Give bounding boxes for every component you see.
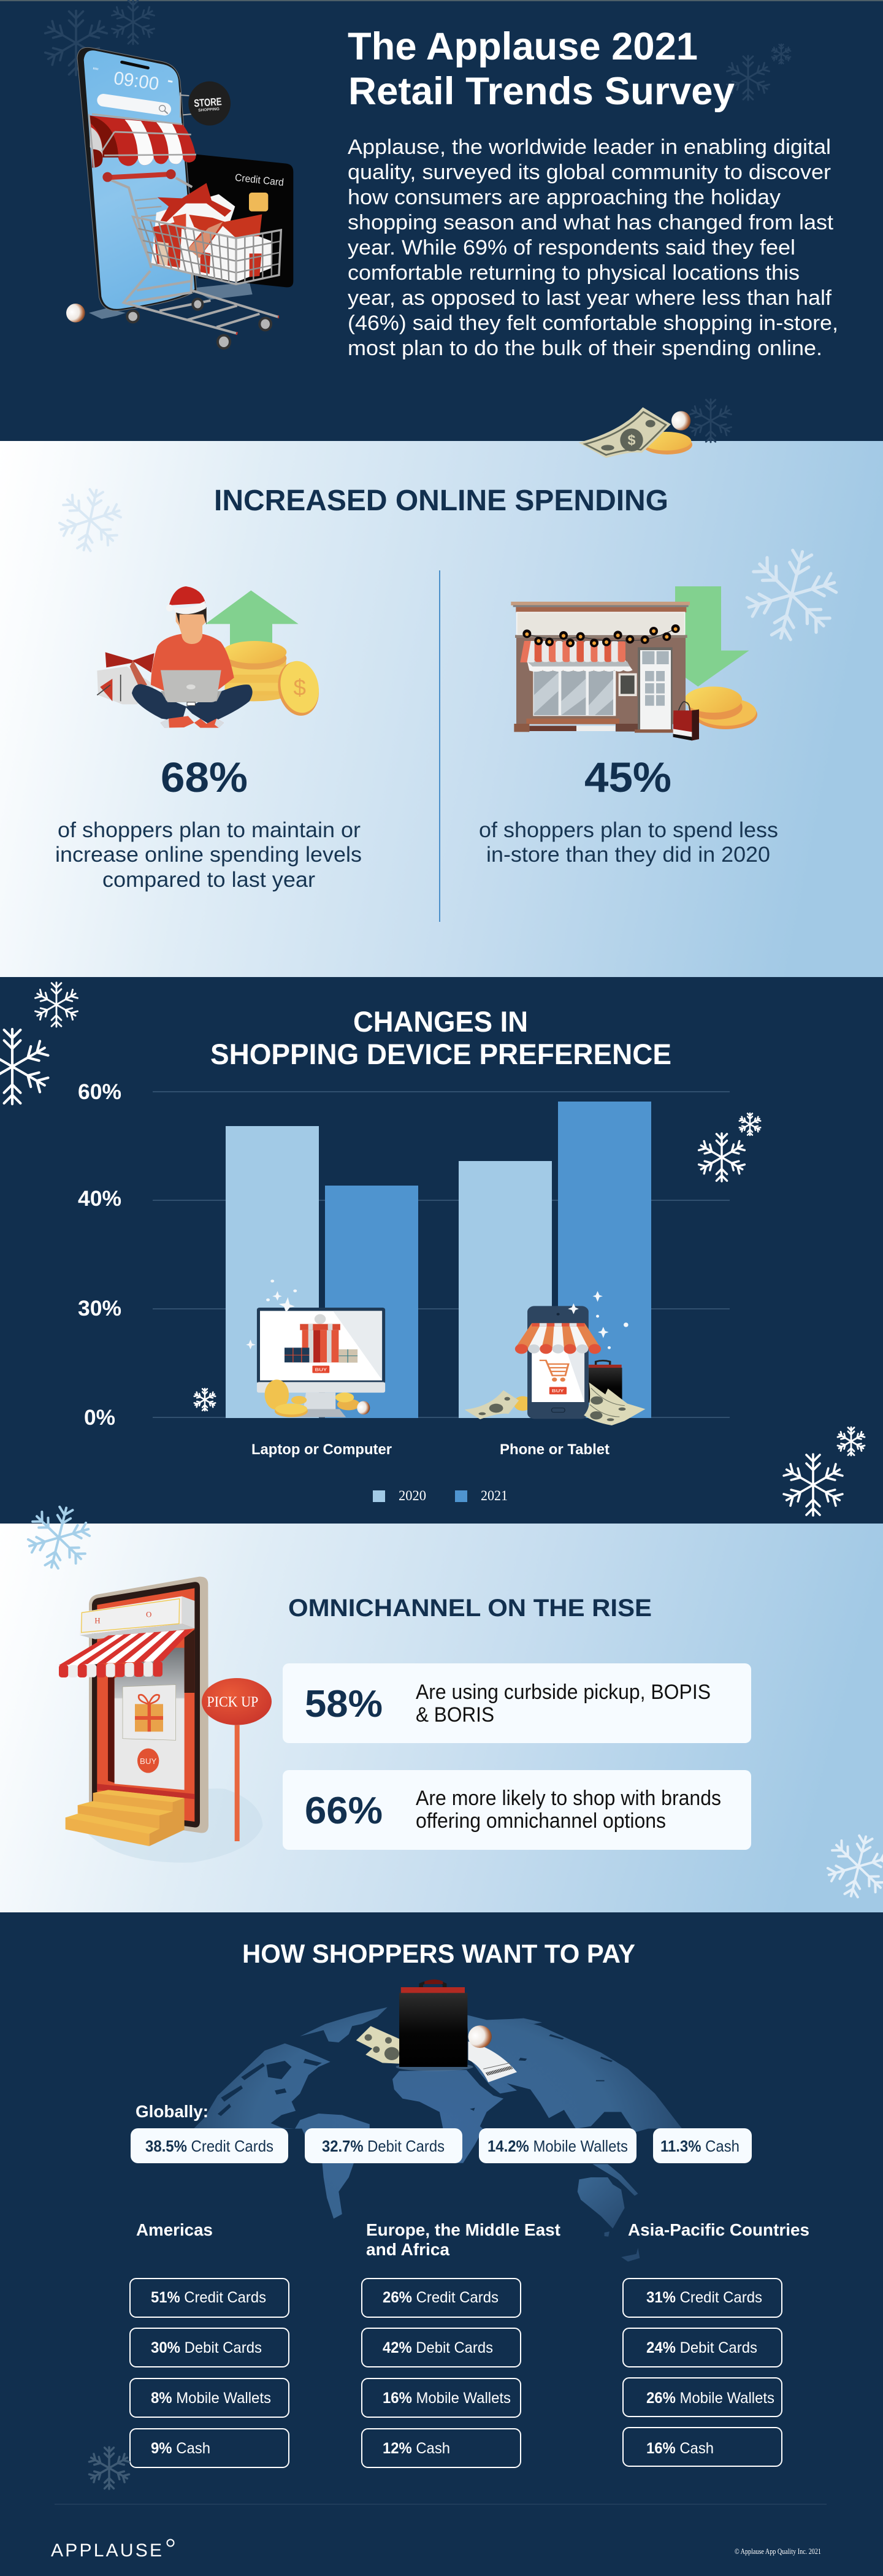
monitor	[257, 1308, 385, 1417]
shopping cart	[102, 169, 281, 348]
text: online spending description: compared to last year	[102, 867, 315, 892]
stat card: 66%	[283, 1770, 751, 1850]
intro text block	[348, 136, 838, 360]
text: online spending description	[55, 818, 362, 892]
pill: mobile wallets	[479, 2128, 636, 2163]
receipt	[468, 2041, 517, 2082]
intro text block: (46%) said they felt comfortable shopping in-store,	[348, 312, 838, 335]
awning	[515, 1323, 601, 1354]
category labels: Phone or Tablet	[500, 1441, 610, 1458]
stat: 68%: 68%	[161, 754, 248, 801]
credit card	[186, 153, 293, 287]
pill: debit cards: 32.7% Debit Cards	[322, 2137, 445, 2155]
region column: Americas: 8% Mobile Wallets	[151, 2390, 271, 2407]
region column: Europe, the Middle East and Africa: 12% Cash	[383, 2440, 450, 2457]
text: online spending description: of shoppers plan to maintain or	[58, 818, 361, 842]
gifts on screen	[285, 1314, 357, 1373]
phone	[77, 47, 197, 311]
global stat pills	[131, 2128, 752, 2163]
awning	[89, 114, 196, 167]
bars: 2020	[226, 1126, 552, 1418]
copyright: © Applause App Quality Inc. 2021	[735, 2547, 821, 2556]
region column: Asia-Pacific Countries: 31% Credit Cards	[646, 2289, 762, 2306]
section snowflakes	[0, 983, 865, 1516]
store sign: STORE	[194, 95, 222, 109]
heading: SHOPPING DEVICE PREFERENCE	[210, 1038, 671, 1070]
pill: cash	[653, 2128, 752, 2163]
money stack	[356, 2026, 403, 2064]
region column: Europe, the Middle East and Africa: 16% Mobile Wallets	[383, 2390, 511, 2407]
string lights	[522, 624, 680, 647]
panel: header	[45, 0, 838, 442]
storefront awning	[520, 641, 633, 672]
section snowflakes	[55, 484, 844, 648]
phone store body	[89, 1577, 208, 1833]
store sign: SHOPPING	[198, 107, 220, 113]
steps	[66, 1790, 185, 1846]
region column: Europe, the Middle East and Africa: 26% Credit Cards	[383, 2289, 499, 2306]
gift card on screen: BUY	[140, 1757, 156, 1766]
sign box: O	[146, 1611, 151, 1619]
bag	[396, 1979, 473, 2071]
region column: Americas	[130, 2220, 289, 2467]
ground shadow	[88, 1788, 262, 1863]
panel: device preference	[0, 983, 865, 1516]
illustration: brick store with coins and down arrow	[511, 586, 757, 740]
phone: 09:00	[112, 68, 160, 94]
icon: shopping bag with money, receipt and ball	[356, 1979, 517, 2082]
heading: CHANGES IN	[353, 1005, 528, 1038]
gifts on screen: BUY	[315, 1367, 327, 1372]
heading: HOW SHOPPERS WANT TO PAY	[242, 1939, 635, 1969]
stat: 45%: 45%	[584, 754, 671, 801]
grid lines and axis labels: 60%	[78, 1080, 121, 1104]
legend	[373, 1488, 508, 1503]
bag	[589, 1360, 622, 1403]
footer	[51, 2504, 827, 2561]
world map globe	[194, 2007, 682, 2261]
illustration: smartphone shop with money and bag	[465, 1291, 645, 1425]
panel: omnichannel on the rise	[23, 1501, 883, 1903]
region column: Europe, the Middle East and Africa: and Africa	[366, 2240, 449, 2259]
snowflake	[89, 2447, 129, 2489]
pill: cash: 11.3% Cash	[660, 2137, 740, 2155]
sign box: H	[94, 1617, 101, 1625]
region column: Americas: 30% Debit Cards	[151, 2339, 262, 2356]
intro text block: Applause, the worldwide leader in enabling digital	[348, 136, 831, 159]
section snowflakes	[23, 1501, 883, 1903]
pill: debit cards	[305, 2128, 462, 2163]
intro text block: how consumers are approaching the holiday	[348, 186, 781, 209]
text: in-store spending description: of shoppers plan to spend less	[479, 818, 778, 842]
bars: 2021	[325, 1102, 651, 1418]
shopping bag	[673, 702, 699, 740]
title: The Applause 2021	[348, 25, 698, 68]
region column: Europe, the Middle East and Africa: Europe, the Middle East	[366, 2220, 560, 2239]
wheels	[127, 299, 271, 348]
pick up sign: PICK UP	[207, 1695, 258, 1711]
coin stack	[221, 641, 324, 719]
region column: Asia-Pacific Countries: 26% Mobile Wallets	[646, 2390, 774, 2407]
text: in-store spending description: in-store than they did in 2020	[486, 842, 770, 867]
text: in-store spending description	[479, 818, 778, 867]
region column: Asia-Pacific Countries: Asia-Pacific Countries	[628, 2220, 809, 2239]
stat card: 66%: Are more likely to shop with brands	[416, 1787, 721, 1810]
coins	[685, 686, 757, 729]
bar chart	[78, 1080, 730, 1503]
sparkles	[246, 1279, 297, 1349]
region column: Americas: Americas	[136, 2220, 213, 2239]
money right	[584, 1382, 645, 1425]
stat card: 58%	[283, 1663, 751, 1743]
category labels	[251, 1441, 610, 1458]
cart icon	[540, 1360, 568, 1376]
pick up sign	[202, 1678, 272, 1841]
title	[348, 25, 735, 113]
region column: Europe, the Middle East and Africa	[362, 2220, 560, 2467]
store building	[511, 602, 690, 733]
section background: device preference	[0, 977, 883, 1524]
intro text block: most plan to do the bulk of their spending online.	[348, 337, 822, 360]
region column: Asia-Pacific Countries	[623, 2220, 809, 2466]
money left	[465, 1390, 532, 1419]
panel: how shoppers want to pay	[89, 1939, 809, 2489]
illustration: desktop computer with gifts and coins	[246, 1279, 385, 1417]
intro text block: comfortable returning to physical locations this	[348, 261, 800, 285]
striped awning	[59, 1630, 192, 1677]
ball ornament	[66, 304, 85, 323]
region column: Americas: 51% Credit Cards	[151, 2289, 266, 2306]
logo: Applause: APPLAUSE	[51, 2540, 162, 2561]
stat card: 66%: offering omnichannel options	[416, 1809, 666, 1833]
grid lines and axis labels: 0%	[84, 1406, 115, 1430]
section background: omnichannel	[0, 1524, 883, 1912]
section background: header	[0, 0, 883, 441]
section background: how shoppers pay	[0, 1912, 883, 2576]
gift	[97, 652, 155, 704]
pill: mobile wallets: 14.2% Mobile Wallets	[487, 2137, 628, 2155]
bows	[158, 183, 262, 258]
grid lines and axis labels	[78, 1080, 730, 1430]
intro text block: year. While 69% of respondents said they feel	[348, 236, 795, 259]
illustration: phone storefront with shopping cart and credit card	[66, 47, 293, 348]
sign box	[80, 1597, 194, 1639]
legend: 2020	[399, 1488, 426, 1503]
pill: credit cards: 38.5% Credit Cards	[145, 2137, 273, 2155]
region column: Asia-Pacific Countries: 16% Cash	[646, 2440, 714, 2457]
grid lines and axis labels: 30%	[78, 1297, 121, 1321]
phone: BUY	[552, 1388, 564, 1393]
person	[132, 586, 253, 728]
heading: OMNICHANNEL ON THE RISE	[288, 1595, 652, 1622]
stat card: 58%: 58%	[305, 1683, 383, 1725]
heading: INCREASED ONLINE SPENDING	[214, 485, 668, 517]
grid lines and axis labels: 40%	[78, 1187, 121, 1211]
sparkles	[568, 1291, 629, 1349]
legend: 2021	[481, 1488, 508, 1503]
stat card: 66%: 66%	[305, 1790, 383, 1832]
region column: Asia-Pacific Countries: 24% Debit Cards	[646, 2339, 757, 2356]
gift card on screen	[123, 1685, 176, 1773]
panel: increased online spending	[55, 484, 844, 922]
heading	[210, 1005, 671, 1070]
divider	[439, 570, 440, 922]
text: online spending description: increase online spending levels	[55, 842, 362, 867]
pill: credit cards	[131, 2128, 288, 2163]
credit card: Credit Card	[234, 172, 285, 188]
globally label: Globally:	[136, 2102, 208, 2121]
store sign	[180, 82, 231, 126]
region column: Americas: 9% Cash	[151, 2440, 210, 2457]
stat card: 58%: Are using curbside pickup, BOPIS	[416, 1681, 711, 1704]
phone	[515, 1306, 601, 1419]
header snowflakes	[45, 0, 791, 442]
illustration: shopper with santa hat, coins and up arrow	[97, 586, 324, 728]
intro text block: year, as opposed to last year where less than half	[348, 286, 831, 310]
region column: Europe, the Middle East and Africa: 42% Debit Cards	[383, 2339, 493, 2356]
icon: dollar bill, coin and ball on header edge	[578, 407, 692, 458]
title: Retail Trends Survey	[348, 70, 735, 113]
coin stack: $	[293, 675, 306, 700]
intro text block: quality, surveyed its global community to discover	[348, 161, 831, 184]
stat card: 58%: & BORIS	[416, 1703, 494, 1727]
coins and ball	[265, 1379, 370, 1417]
section background: increased online spending	[0, 441, 883, 977]
intro text block: shopping season and what has changed from last	[348, 211, 833, 234]
icon: dollar bill, coin and ball on header edge: $	[628, 432, 636, 448]
category labels: Laptop or Computer	[251, 1441, 392, 1458]
illustration: phone storefront with pick up sign	[59, 1577, 272, 1863]
